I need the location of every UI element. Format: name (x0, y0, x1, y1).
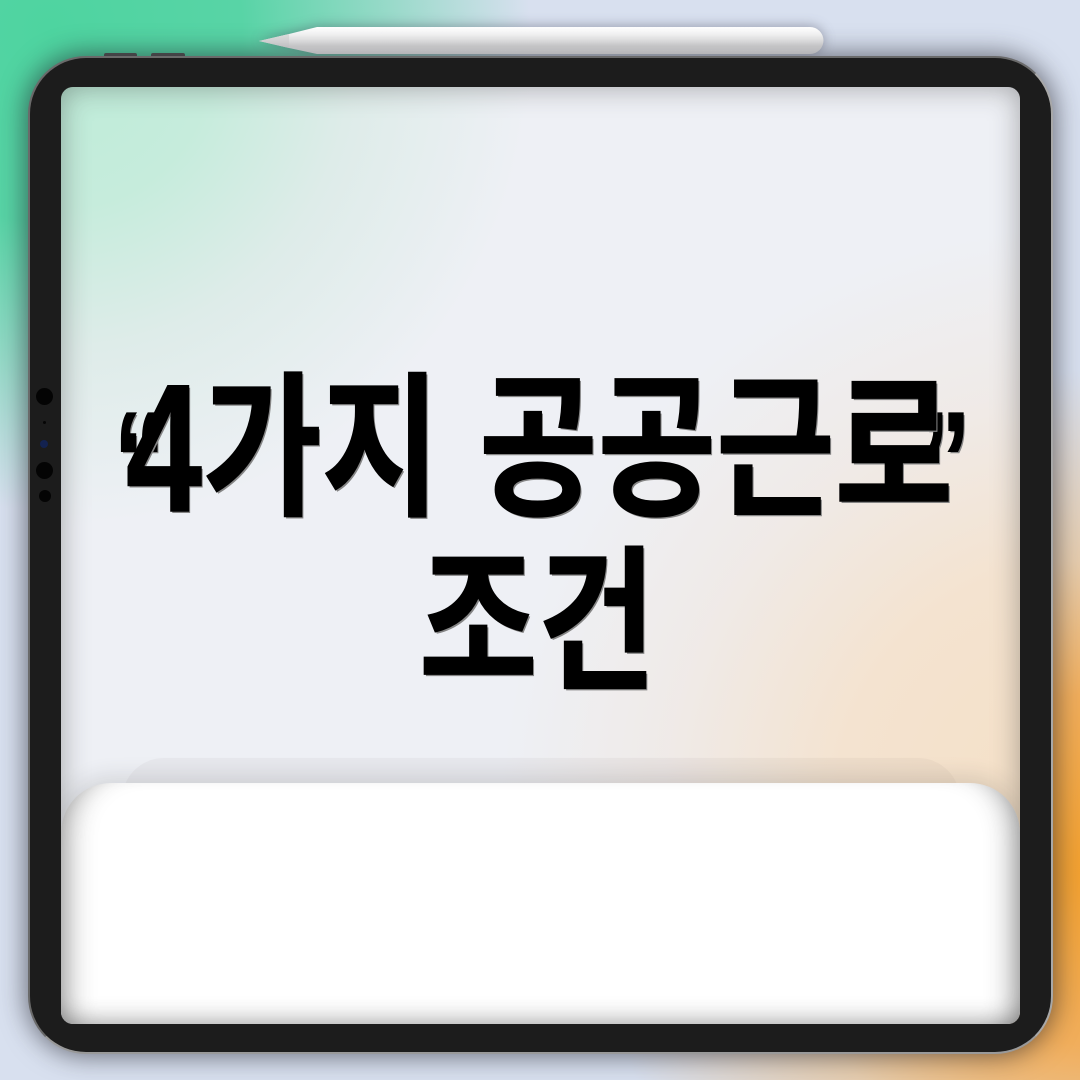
white card (61, 783, 1020, 1024)
opening quote: “ (114, 384, 165, 535)
back card (122, 758, 960, 878)
closing quote: ” (920, 384, 971, 535)
title (114, 346, 971, 711)
word: 가지: 가지 (203, 363, 440, 537)
camera cluster (36, 388, 53, 502)
word: 조건: 조건 (419, 537, 656, 711)
apple pencil (259, 19, 829, 56)
tablet screen (61, 87, 1020, 1024)
word: 공공근로: 공공근로 (479, 363, 953, 537)
volume buttons (104, 53, 185, 56)
screen edge shadow (61, 87, 1020, 1024)
number 4: 4 (126, 346, 202, 550)
